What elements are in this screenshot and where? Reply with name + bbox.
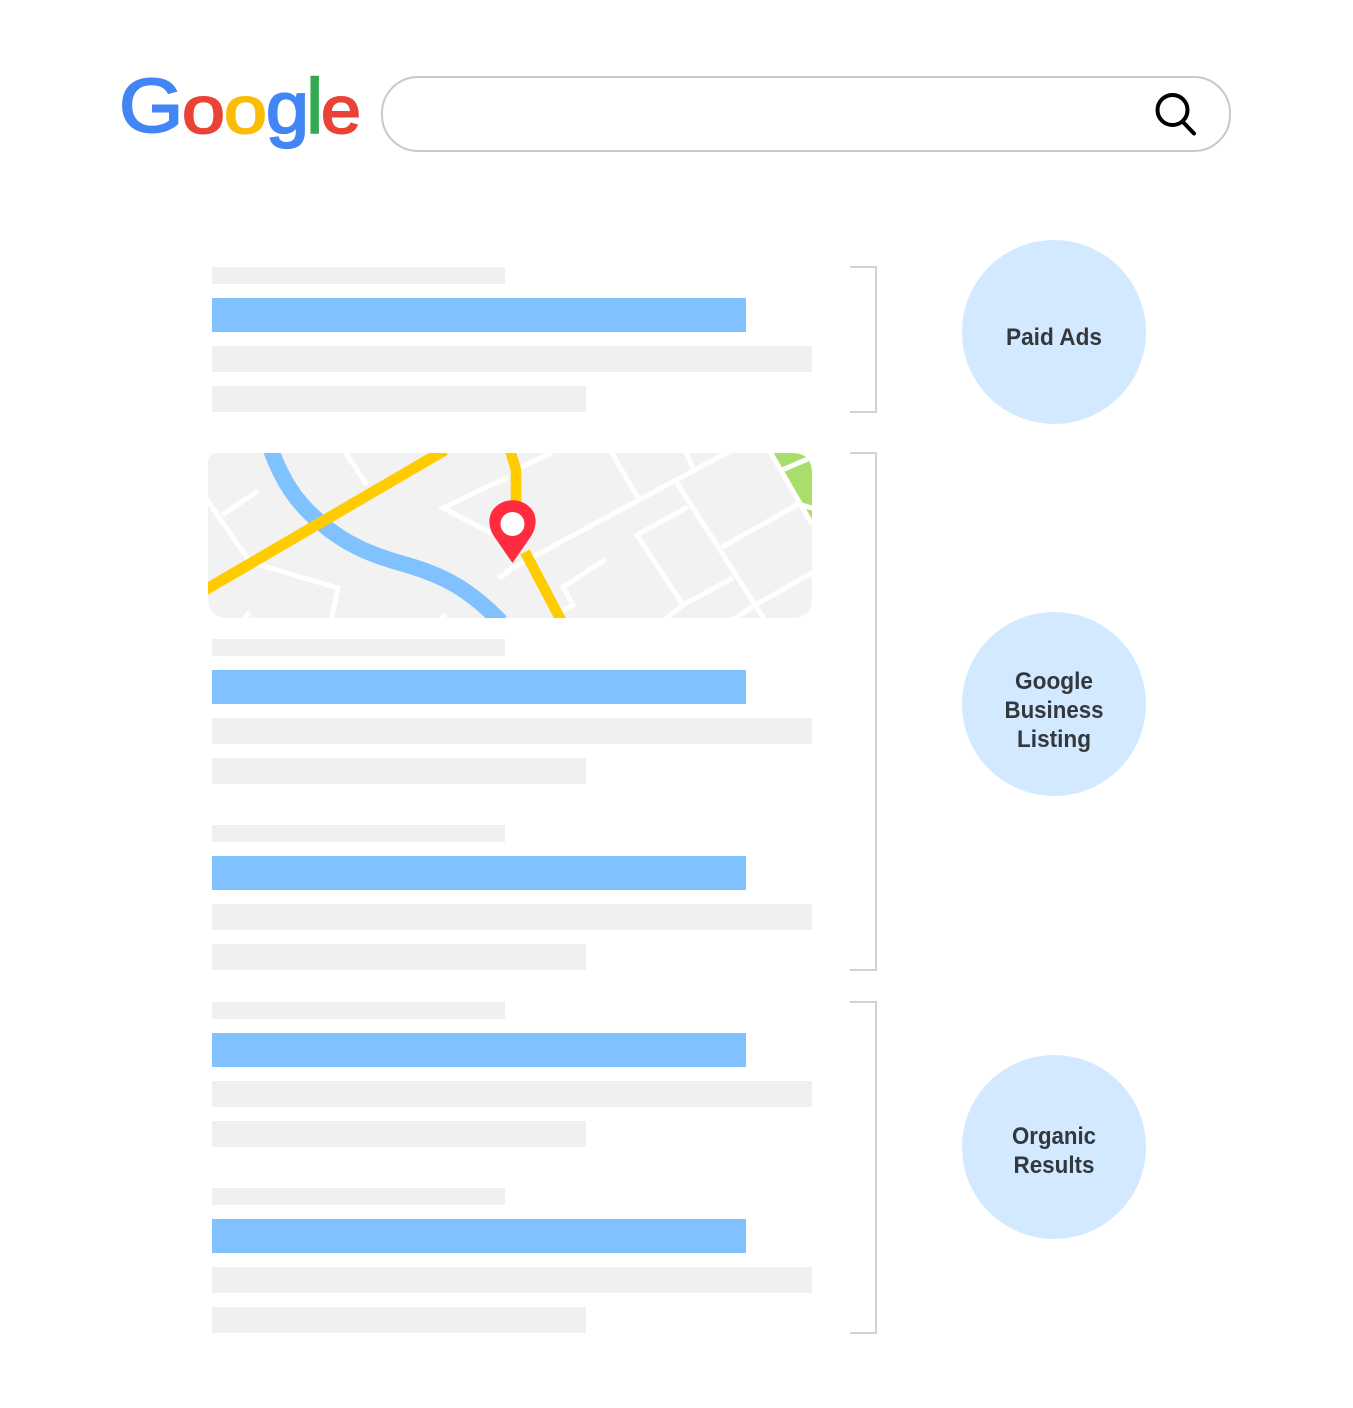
Google logo: G xyxy=(119,63,183,148)
Google logo: o xyxy=(182,74,225,148)
circle label: Google Business Listing: Listing xyxy=(1017,726,1091,753)
Google logo: o xyxy=(224,74,267,148)
circle label: Organic Results: Organic xyxy=(1012,1123,1096,1150)
Google logo xyxy=(119,62,361,150)
Google logo: e xyxy=(321,72,361,147)
map streets xyxy=(205,450,815,625)
panel: paid ad result xyxy=(212,267,812,412)
search bar xyxy=(382,77,1230,151)
panel: business listing result one xyxy=(212,639,812,784)
circle label: Organic Results: Results xyxy=(1014,1152,1094,1179)
map xyxy=(205,450,815,625)
panel: organic result two xyxy=(212,1188,812,1333)
icon: map pin xyxy=(489,500,536,563)
map river xyxy=(271,450,501,622)
circle label: Google Business Listing: Google xyxy=(1015,668,1093,695)
circle label: Google Business Listing: Business xyxy=(1004,697,1104,724)
circle label: Paid Ads: Paid Ads xyxy=(1006,324,1102,351)
panel: business listing result two xyxy=(212,825,812,970)
bracket: paid ads xyxy=(850,267,876,412)
circle label: Paid Ads xyxy=(962,240,1146,424)
bracket: business listing xyxy=(850,453,876,970)
icon: magnifying glass xyxy=(1158,95,1194,134)
map highways xyxy=(205,450,445,590)
circle label: Organic Results xyxy=(962,1055,1146,1239)
Google logo: l xyxy=(306,62,323,150)
panel: organic result one xyxy=(212,1002,812,1147)
Google logo: g xyxy=(266,67,309,149)
bracket: organic results xyxy=(850,1002,876,1333)
circle label: Google Business Listing xyxy=(962,612,1146,796)
map park xyxy=(774,453,812,525)
